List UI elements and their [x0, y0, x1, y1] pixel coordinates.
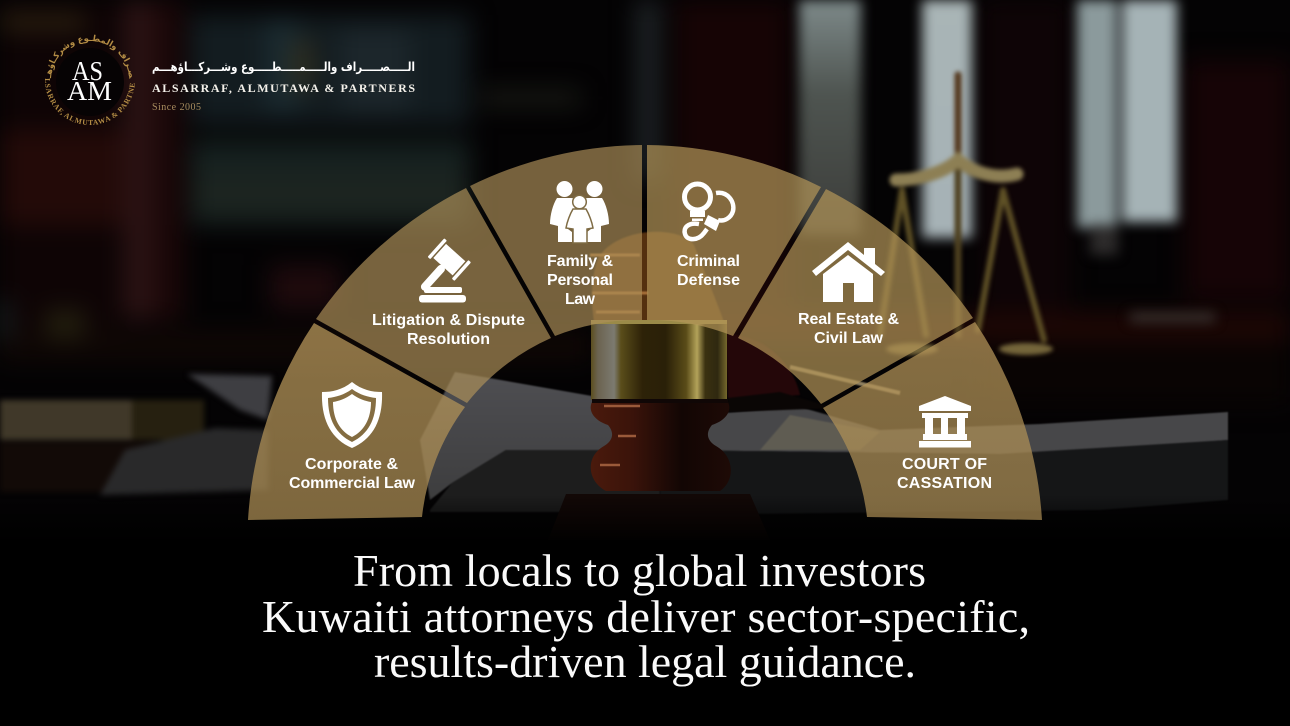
panel: corporate & commercial law	[248, 323, 465, 520]
label: litigation & dispute resolution: Resolution	[407, 331, 490, 348]
icon: courthouse	[919, 396, 971, 448]
gavel	[548, 232, 900, 540]
panel: family & personal law	[470, 145, 642, 336]
semicircle sector panels	[248, 145, 1042, 520]
label: corporate & commercial law: Corporate &	[305, 456, 398, 473]
panel: litigation & dispute resolution	[316, 188, 551, 403]
center open book	[420, 372, 660, 512]
wordmark: english name: ALSARRAF, ALMUTAWA & PARTNERS	[152, 81, 415, 95]
headline: From locals to global investors	[353, 545, 926, 596]
label: real estate & civil law: Civil Law	[814, 330, 884, 347]
left table and book	[0, 374, 272, 495]
label: court of cassation: CASSATION	[897, 475, 992, 492]
label: family & personal law: Personal	[547, 272, 613, 289]
emblem: circular seal: AS	[72, 56, 103, 86]
label: real estate & civil law: Real Estate &	[798, 311, 899, 328]
panel: court of cassation	[823, 322, 1042, 520]
icon: handcuffs	[684, 184, 733, 239]
bottom black fade	[0, 495, 1290, 545]
label: court of cassation: COURT OF	[902, 456, 987, 473]
headline: Kuwaiti attorneys deliver sector-specific,	[262, 591, 1030, 642]
label: corporate & commercial law: Commercial Law	[289, 475, 416, 492]
right book	[660, 407, 1228, 515]
tagline: since 2005: Since 2005	[152, 102, 201, 113]
scales of justice	[880, 75, 1053, 355]
label: family & personal law: Law	[565, 291, 596, 308]
label: litigation & dispute resolution: Litigation & Dispute	[372, 312, 525, 329]
label: criminal defense: Defense	[677, 272, 740, 289]
emblem: circular seal	[45, 34, 135, 125]
icon: gavel	[409, 238, 471, 302]
icon: family	[550, 181, 609, 243]
label: family & personal law: Family &	[547, 253, 613, 270]
icon: shield	[322, 382, 382, 448]
headline: results-driven legal guidance.	[374, 636, 916, 687]
emblem: circular seal: AM	[67, 76, 112, 106]
panel: criminal defense	[647, 145, 821, 336]
windows	[799, 0, 1215, 322]
logo: firm emblem and wordmark	[45, 34, 415, 125]
panel: real estate & civil law	[738, 189, 973, 404]
wordmark: arabic name: الـــــصـــــراف والـــــمـــــطـــــوع وشـــركـــاؤهـــم	[152, 59, 415, 74]
label: criminal defense: Criminal	[677, 253, 740, 270]
icon: house	[812, 242, 885, 302]
